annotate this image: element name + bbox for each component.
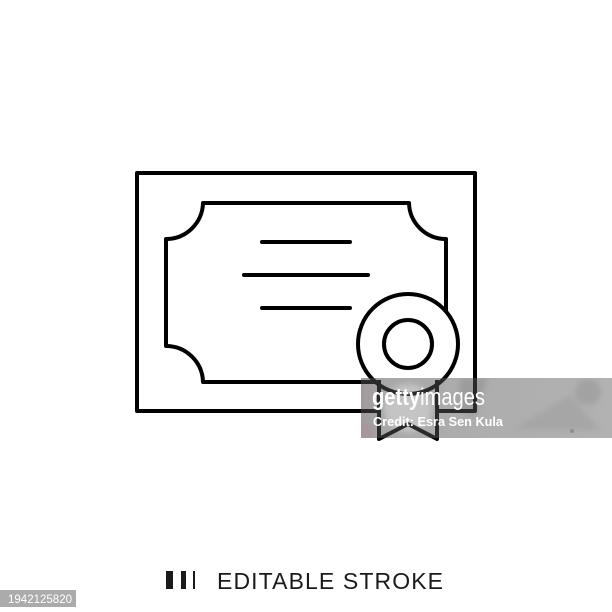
band background xyxy=(361,378,612,438)
stroke weight icon xyxy=(166,571,195,589)
editable stroke label: EDITABLE STROKE xyxy=(217,568,443,594)
seal inner circle xyxy=(384,320,432,368)
certificate outer frame xyxy=(137,173,475,411)
watermark credit text: Credit: Esra Sen Kula xyxy=(373,414,504,429)
icon lines seen through band xyxy=(361,378,477,438)
band texture xyxy=(361,378,600,438)
watermark logo text: gettyimages xyxy=(372,384,485,411)
ribbon xyxy=(379,380,437,439)
certificate inner scalloped border xyxy=(166,203,446,382)
text lines xyxy=(244,242,368,308)
infographic canvas xyxy=(0,171,612,607)
seal outer circle xyxy=(358,294,458,394)
icon: certificate xyxy=(137,173,475,439)
image id number: 1942125820 xyxy=(8,592,72,606)
watermark band xyxy=(361,378,612,438)
image id tag xyxy=(0,590,76,607)
